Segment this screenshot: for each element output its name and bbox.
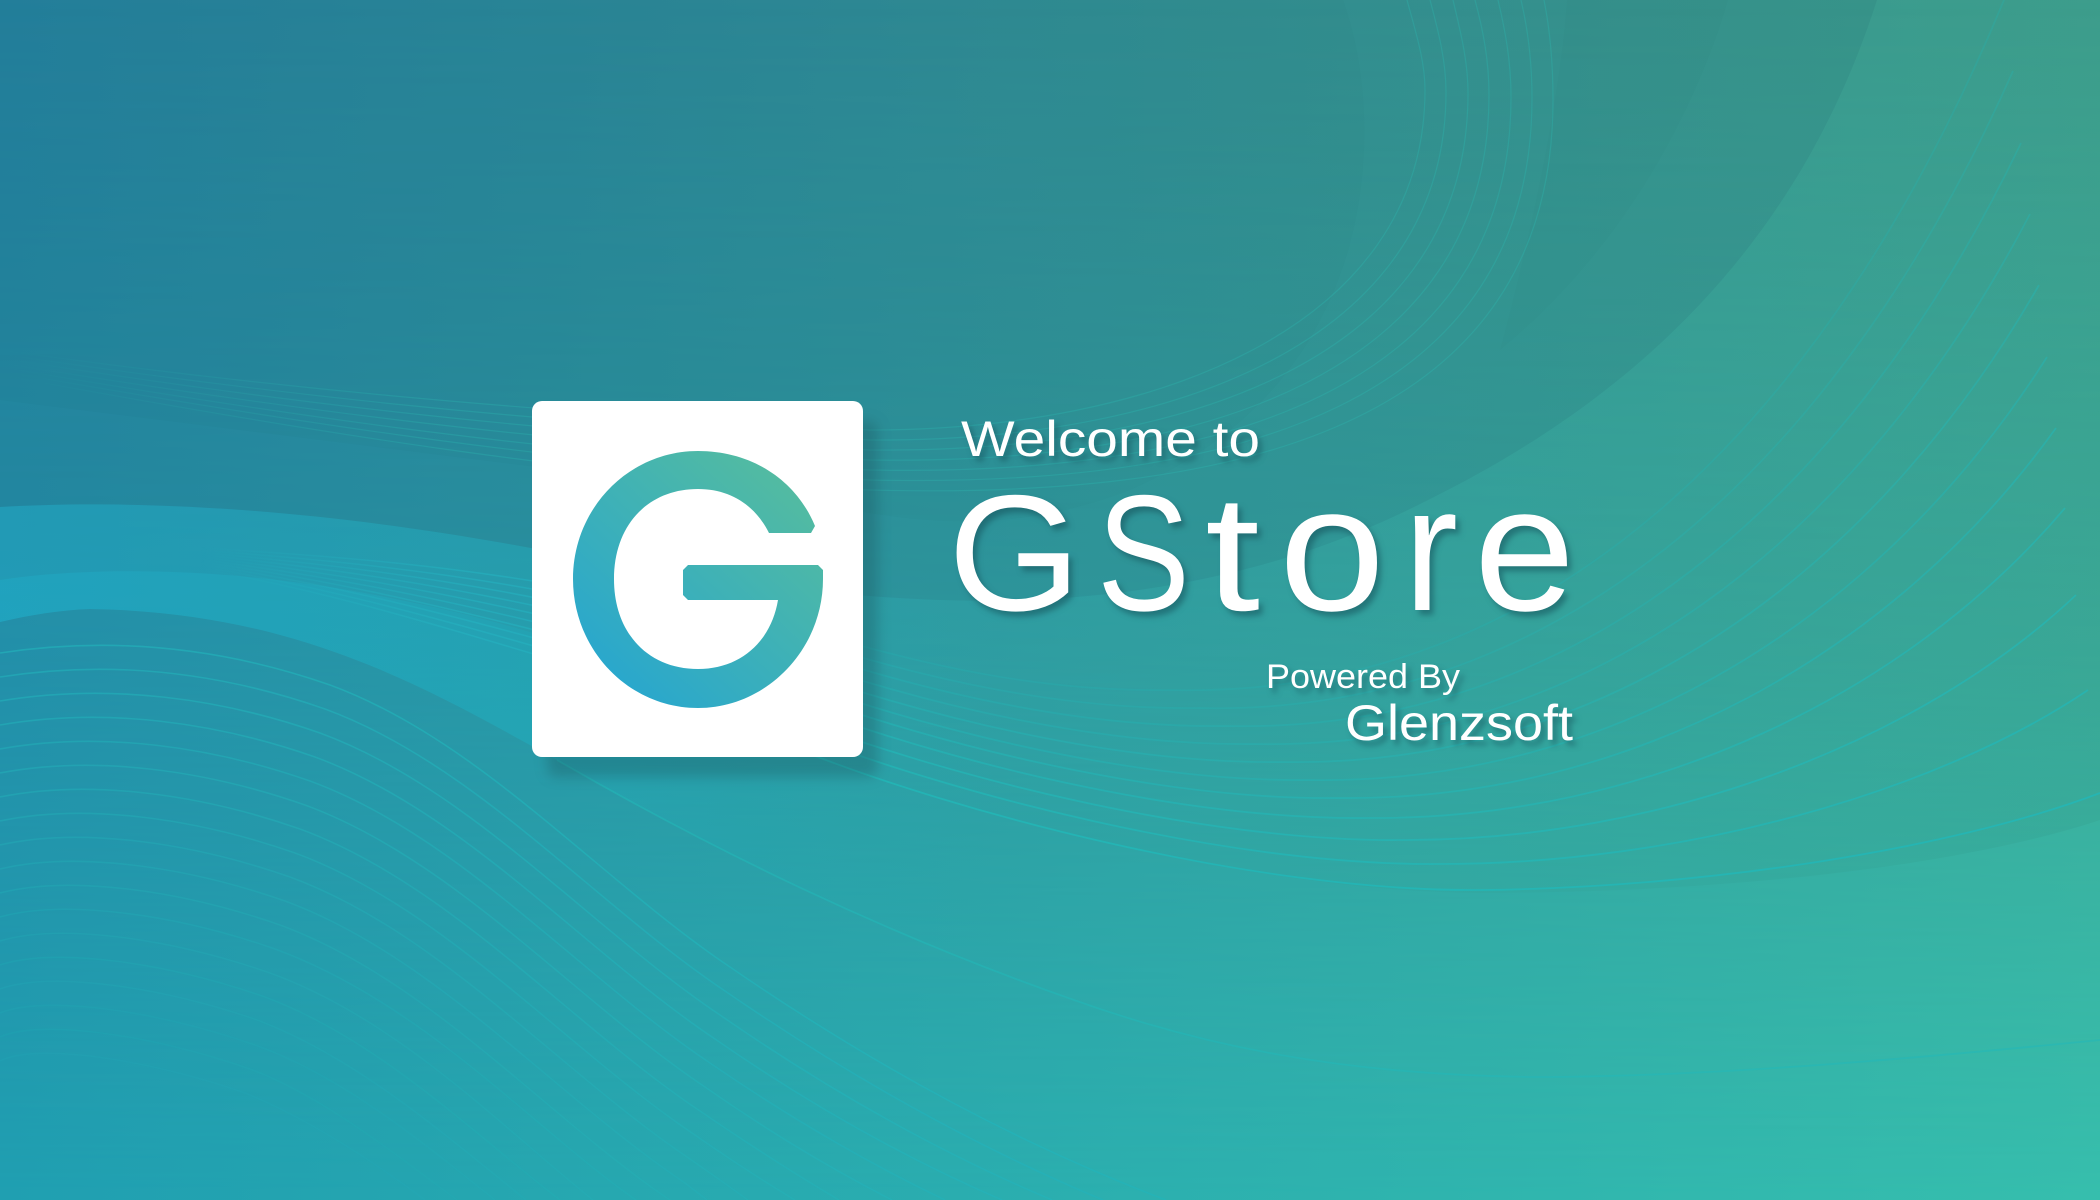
contour lines: lower left fan: [0, 645, 1166, 1200]
background: dark upper region: [0, 0, 1877, 601]
icon: G logo: [573, 451, 823, 708]
contour line: long bottom sweep: [557, 760, 2100, 1077]
title: GStore: r: [1404, 449, 1458, 648]
background: faint arc top right: [1500, 0, 1728, 350]
logo card: [532, 401, 863, 757]
card background: [532, 401, 863, 757]
title: GStore: o: [1279, 449, 1385, 648]
title: GStore: e: [1474, 449, 1575, 648]
background: dark right-side sweep: [800, 0, 2100, 893]
title: GStore: t: [1205, 461, 1260, 645]
text: welcome to: Welcome to: [961, 411, 1260, 467]
contour lines: right fan: [800, 0, 2100, 890]
contour lines: band fan left of card: [160, 545, 600, 674]
contour lines: upper arcs: [0, 0, 1553, 491]
background: lighter wave bands: [0, 504, 1064, 1000]
title: GStore: G: [948, 461, 1081, 645]
text: powered by: Powered By: [1266, 658, 1460, 696]
text: Glenzsoft: Glenzsoft: [1345, 695, 1573, 751]
background: inner dark circle: [0, 0, 1364, 521]
title: GStore: S: [1097, 461, 1190, 645]
